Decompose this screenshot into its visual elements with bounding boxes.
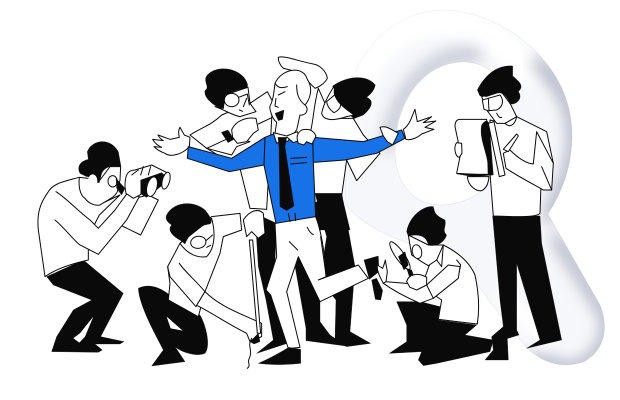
shirt [168, 213, 242, 317]
hair [477, 66, 521, 104]
rear foot [485, 327, 508, 360]
hands [125, 165, 168, 198]
hair [333, 78, 375, 119]
binoculars [141, 173, 169, 197]
shirt [422, 245, 479, 324]
head [482, 90, 517, 123]
head [180, 218, 214, 257]
hair [407, 206, 447, 246]
trousers [389, 302, 493, 366]
head [408, 235, 443, 266]
glasses [190, 235, 207, 250]
left hand [153, 127, 190, 155]
helper hand on shoulder [297, 129, 316, 145]
cane [249, 240, 261, 333]
magnifier [387, 240, 413, 272]
man leaning behind, right [278, 57, 380, 230]
trousers [47, 260, 124, 352]
glasses [487, 95, 502, 111]
tie [278, 137, 294, 211]
man with watch behind, left [255, 193, 371, 353]
arm to floor [197, 292, 262, 342]
holding hand [407, 274, 427, 290]
watch [221, 130, 234, 143]
man with cane [138, 204, 265, 368]
face [215, 87, 256, 117]
rear arm [120, 195, 158, 235]
hair [205, 69, 248, 109]
magnifying glass [345, 10, 608, 368]
torso [190, 92, 273, 209]
glasses [224, 93, 239, 107]
paper belly [467, 177, 489, 191]
mouth [275, 110, 284, 121]
head [79, 167, 121, 205]
eye ring [108, 176, 117, 187]
helper hand on arm [380, 127, 398, 145]
middle leg [293, 257, 346, 346]
hand at mouth [232, 118, 258, 143]
shoe, raised [364, 256, 379, 279]
hand [377, 260, 387, 283]
trousers [493, 216, 562, 348]
central man with blue shirt [153, 70, 436, 365]
man with binoculars [38, 142, 172, 352]
neck and head [270, 70, 311, 142]
shirt [38, 177, 120, 277]
man with notepad [455, 66, 562, 348]
hair [166, 204, 211, 244]
arm [207, 137, 250, 155]
hair [79, 142, 121, 183]
shoe, planted [258, 347, 301, 365]
trousers [138, 286, 208, 366]
blue shirt [187, 130, 405, 223]
glasses [411, 244, 423, 259]
kneeling man with magnifier [377, 206, 508, 366]
shirt [490, 117, 553, 217]
arm [503, 132, 553, 190]
notepad [455, 119, 488, 175]
collar [273, 132, 300, 143]
measuring tape [247, 338, 252, 368]
front arm [55, 192, 139, 254]
trousers [258, 215, 383, 365]
pencil [503, 134, 518, 152]
right hand [403, 109, 436, 140]
left leg [255, 213, 287, 353]
hand on cane [243, 211, 265, 238]
legs [313, 195, 350, 230]
left hand [455, 143, 462, 157]
glasses [327, 93, 341, 113]
raised arm [278, 57, 327, 88]
arm [383, 265, 460, 303]
torso [310, 88, 380, 203]
face [322, 86, 354, 120]
right leg [315, 193, 371, 347]
